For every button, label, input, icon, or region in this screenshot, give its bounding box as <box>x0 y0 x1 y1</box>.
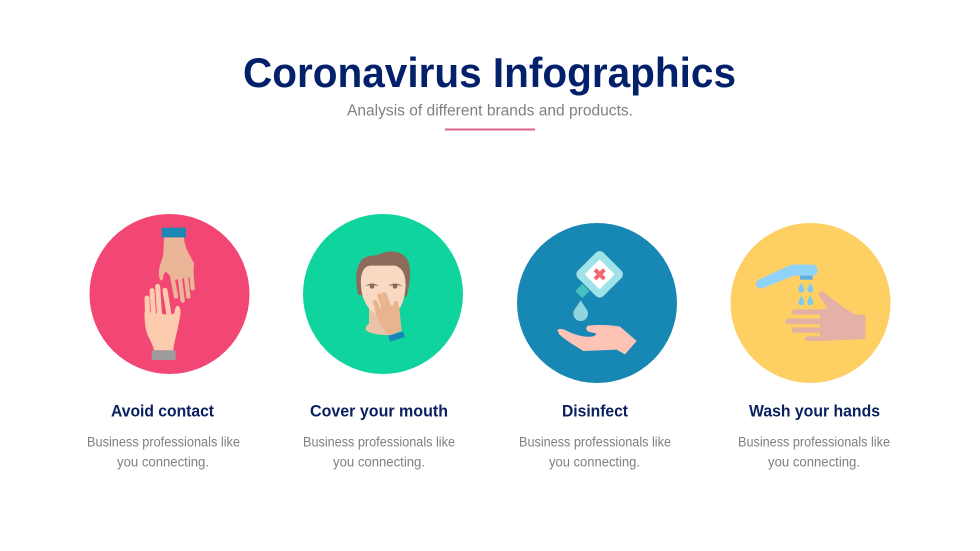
panel: disinfect <box>517 223 677 470</box>
body text: you connecting. <box>549 454 640 470</box>
icon: faucet, water drops and hand <box>730 223 890 383</box>
body text <box>303 434 455 470</box>
icon: sanitizer bottle, drop and hand <box>517 223 677 383</box>
body text: you connecting. <box>117 454 209 470</box>
panel: wash your hands <box>730 223 890 470</box>
icon: face with hand over mouth <box>303 214 463 374</box>
body text: Business professionals like <box>519 434 671 450</box>
body text: Business professionals like <box>87 434 240 450</box>
body text <box>519 434 671 470</box>
heading: Cover your mouth <box>310 402 448 420</box>
body text <box>738 434 890 470</box>
panel: cover your mouth <box>303 214 463 470</box>
icon: two hands reaching <box>90 214 250 374</box>
body text: you connecting. <box>333 454 425 470</box>
heading: Avoid contact <box>111 402 214 420</box>
body text: Business professionals like <box>303 434 455 450</box>
heading: Wash your hands <box>749 402 880 420</box>
title underline <box>445 128 535 130</box>
body text: you connecting. <box>768 454 860 470</box>
title: Coronavirus Infographics <box>243 49 736 96</box>
body text: Business professionals like <box>738 434 890 450</box>
heading: Disinfect <box>562 402 628 420</box>
subtitle: Analysis of different brands and products. <box>347 102 633 120</box>
body text <box>87 434 240 470</box>
panel: avoid contact <box>87 214 250 470</box>
